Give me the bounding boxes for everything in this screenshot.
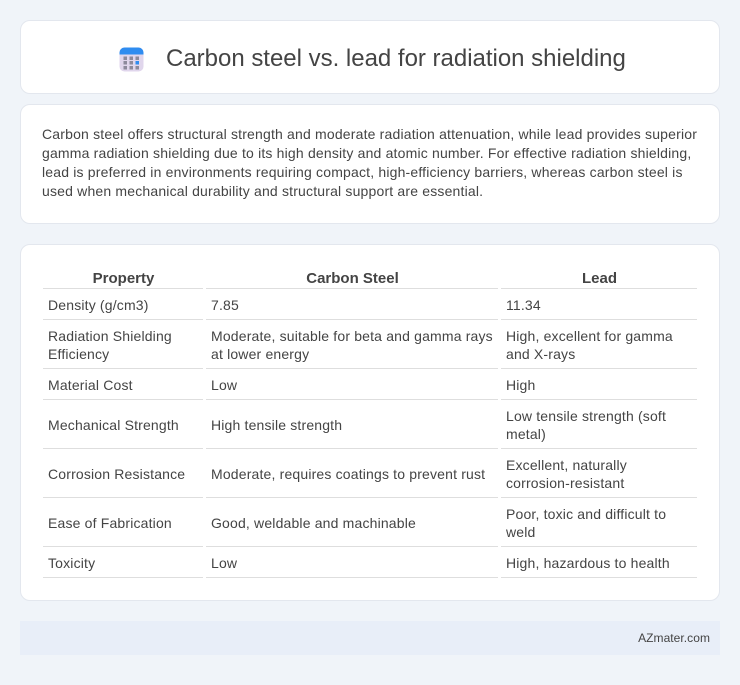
row: radiation shielding efficiency: High, excellent for gamma	[506, 328, 673, 344]
row: material cost: Low	[211, 377, 237, 393]
row: mechanical strength: Low tensile strength (soft	[506, 408, 666, 424]
row: toxicity	[48, 555, 670, 571]
row: ease of fabrication: Poor, toxic and difficult to	[506, 506, 666, 522]
row: radiation shielding efficiency: and X-rays	[506, 346, 575, 362]
row: corrosion resistance: Excellent, naturally	[506, 457, 627, 473]
row: corrosion resistance: corrosion-resistant	[506, 475, 624, 491]
row: density: 11.34	[506, 297, 541, 313]
summary text: Carbon steel offers structural strength and moderate radiation attenuation, while lead provides superior	[42, 126, 697, 142]
comparison table	[43, 270, 697, 578]
panel: title card	[20, 20, 720, 94]
row: radiation shielding efficiency: Radiation Shielding	[48, 328, 172, 344]
row: mechanical strength: metal)	[506, 426, 546, 442]
row: material cost	[48, 377, 535, 393]
table header	[93, 270, 617, 287]
footer source text: AZmater.com	[638, 631, 710, 645]
row: mechanical strength: Mechanical Strength	[48, 417, 179, 433]
row: toxicity: High, hazardous to health	[506, 555, 670, 571]
panel: comparison table card	[20, 244, 720, 601]
row: radiation shielding efficiency: Efficiency	[48, 346, 109, 362]
table header: Carbon Steel	[306, 270, 399, 287]
panel: summary card	[20, 104, 720, 224]
summary text: lead is preferred in environments requiring compact, high-efficiency barriers, whereas carbon steel is	[42, 164, 683, 180]
row: mechanical strength: High tensile strength	[211, 417, 342, 433]
row: density: 7.85	[211, 297, 239, 313]
row: ease of fabrication: Ease of Fabrication	[48, 515, 172, 531]
row: corrosion resistance: Moderate, requires coatings to prevent rust	[211, 466, 485, 482]
row: density	[48, 297, 541, 313]
row: radiation shielding efficiency	[48, 328, 673, 362]
row: material cost: Material Cost	[48, 377, 133, 393]
summary text: used when mechanical durability and structural support are essential.	[42, 183, 483, 199]
row: mechanical strength	[48, 408, 666, 442]
row: ease of fabrication: weld	[506, 524, 535, 540]
row: ease of fabrication: Good, weldable and machinable	[211, 515, 416, 531]
footer bar	[20, 621, 720, 655]
row: radiation shielding efficiency: Moderate, suitable for beta and gamma rays	[211, 328, 493, 344]
row: corrosion resistance	[48, 457, 627, 491]
row: ease of fabrication	[48, 506, 666, 540]
row: material cost: High	[506, 377, 535, 393]
row: density: Density (g/cm3)	[48, 297, 149, 313]
row: corrosion resistance: Corrosion Resistance	[48, 466, 185, 482]
row: toxicity: Toxicity	[48, 555, 95, 571]
summary text: gamma radiation shielding due to its high density and atomic number. For effective radiation shielding,	[42, 145, 691, 161]
table header: Lead	[582, 270, 617, 287]
table header: Property	[93, 270, 154, 287]
icon: calendar	[120, 48, 144, 72]
summary text	[42, 126, 697, 199]
row: toxicity: Low	[211, 555, 237, 571]
row: radiation shielding efficiency: at lower energy	[211, 346, 309, 362]
title: Carbon steel vs. lead for radiation shielding	[166, 45, 626, 72]
